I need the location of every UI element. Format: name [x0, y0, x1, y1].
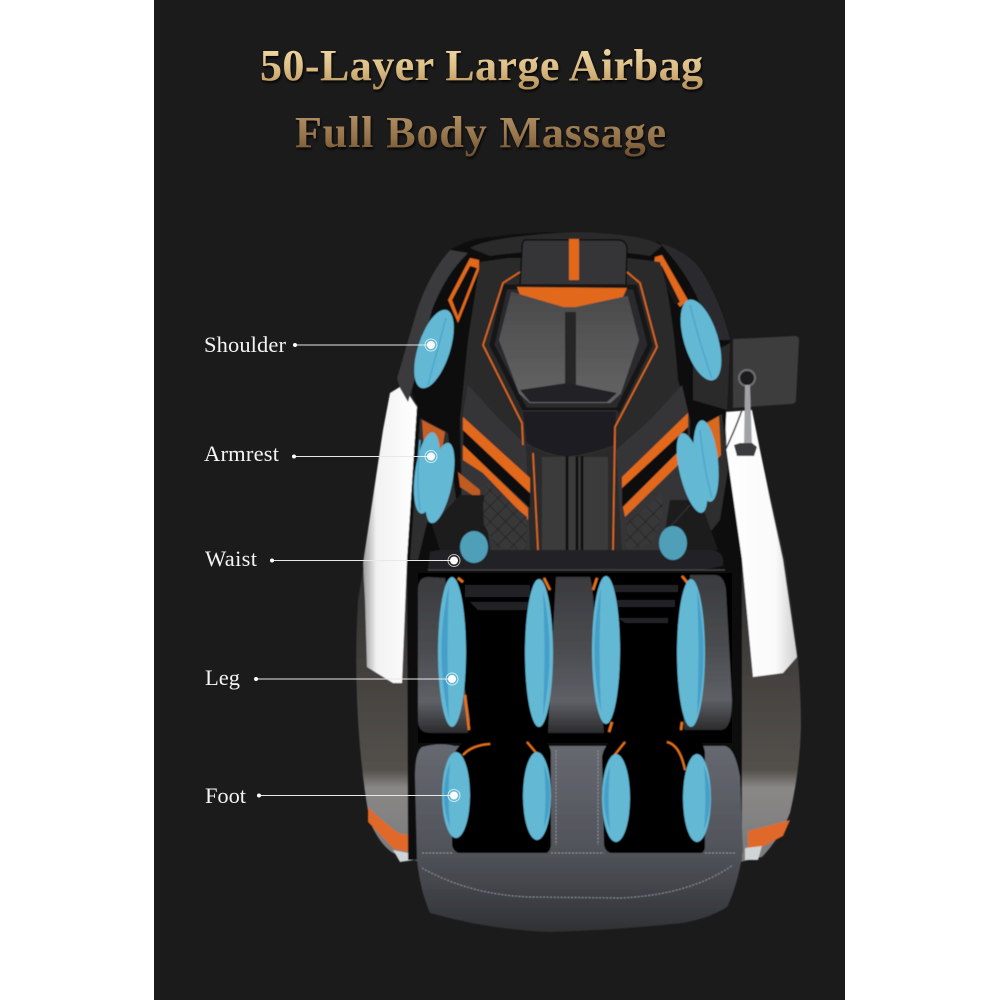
airbag armrest left front — [420, 440, 460, 526]
cables — [660, 410, 742, 538]
control tablet — [660, 336, 799, 538]
leg rest right — [682, 575, 732, 730]
orange back stripes right — [622, 413, 688, 517]
callout: shoulder — [204, 332, 437, 357]
neck centre strip — [565, 312, 576, 385]
airbag foot 3 — [602, 754, 630, 842]
callout: waist — [205, 546, 460, 571]
orange trim left — [368, 807, 414, 853]
foot cavity left — [452, 741, 551, 853]
airbag darker bands — [442, 585, 710, 830]
right upper orange pad — [653, 255, 688, 307]
white side panel right — [725, 410, 797, 677]
hood right edge — [660, 243, 730, 340]
callout: foot — [205, 783, 460, 808]
backrest hood — [397, 233, 742, 860]
airbag leg 3 — [592, 576, 620, 724]
title line 2: Full Body Massage — [295, 108, 666, 157]
white side panel left — [363, 385, 417, 683]
neck lower panel — [520, 383, 617, 402]
armrest orange vent left — [422, 420, 445, 462]
airbags — [406, 295, 730, 842]
airbag armrest right front — [670, 430, 714, 516]
back side cushions — [460, 258, 690, 552]
white base trim — [393, 846, 762, 862]
spine grooves — [567, 456, 582, 552]
lower side shadows — [432, 495, 718, 550]
tablet stand base — [734, 443, 757, 456]
hood top rim — [470, 232, 662, 256]
orange chevron — [517, 287, 627, 309]
collar flap — [522, 411, 617, 457]
armrest orange vent right — [705, 416, 721, 465]
callout: armrest — [204, 441, 437, 466]
airbag waist left — [460, 531, 488, 563]
left upper orange pad — [448, 258, 479, 323]
headrest orange stripe — [569, 239, 579, 280]
side area right — [616, 385, 690, 550]
airbag armrest right back — [690, 419, 722, 503]
callout: leg — [205, 665, 458, 690]
airbag foot 1 — [442, 752, 470, 838]
airbag lobe lines — [418, 305, 712, 510]
chair outer shell — [356, 450, 801, 862]
crossbar highlight — [428, 569, 725, 571]
tablet back arm — [693, 343, 730, 410]
airbag leg 1 — [438, 577, 466, 727]
foot orange piping — [463, 742, 685, 770]
side orange accent — [458, 472, 480, 500]
leg ribs — [465, 585, 678, 623]
leg rest left — [418, 577, 470, 733]
left upper pad centre — [452, 266, 477, 316]
airbag leg 2 — [525, 579, 553, 727]
airbag leg 4 — [677, 579, 705, 727]
callout: leg: Leg — [205, 665, 240, 690]
seat crossbar — [428, 550, 723, 570]
foot rest — [415, 744, 743, 932]
tablet screen — [733, 336, 799, 408]
foot stitching — [422, 750, 735, 898]
airbag shoulder left — [406, 305, 462, 393]
callout: waist: Waist — [205, 546, 258, 571]
title line 1: 50-Layer Large Airbag — [260, 41, 703, 90]
foot cavity right — [602, 740, 705, 853]
orange trim right — [748, 820, 790, 848]
armrest right wall — [700, 414, 728, 545]
airbag armrest left back — [409, 431, 445, 515]
dark background panel — [154, 0, 845, 1000]
armrest left wall — [410, 418, 457, 560]
orange piping — [483, 272, 657, 550]
massage chair — [356, 232, 801, 932]
tablet mount — [739, 370, 755, 386]
leg section background — [418, 573, 732, 743]
neck surround — [492, 287, 650, 410]
airbag waist right — [659, 526, 687, 560]
quilted seat pad left — [483, 483, 527, 550]
orange back stripes left — [463, 417, 530, 520]
title — [260, 41, 703, 157]
quilted seat pad right — [625, 493, 663, 550]
spine strip — [542, 457, 608, 552]
airbag foot 4 — [683, 754, 711, 842]
tablet stand — [744, 385, 752, 447]
leg rest centre — [548, 577, 604, 733]
callout: armrest: Armrest — [204, 441, 280, 466]
leg orange piping — [458, 576, 690, 732]
hood left edge — [397, 250, 468, 402]
right upper pad centre — [655, 266, 680, 305]
airbag foot 2 — [523, 752, 551, 840]
black gaps between stripes — [463, 427, 688, 508]
callout: foot: Foot — [205, 783, 247, 808]
side area left — [462, 385, 530, 550]
headrest — [520, 240, 627, 285]
airbag shoulder right — [672, 295, 730, 385]
neck cushion — [500, 293, 638, 402]
callout: shoulder: Shoulder — [204, 332, 286, 357]
